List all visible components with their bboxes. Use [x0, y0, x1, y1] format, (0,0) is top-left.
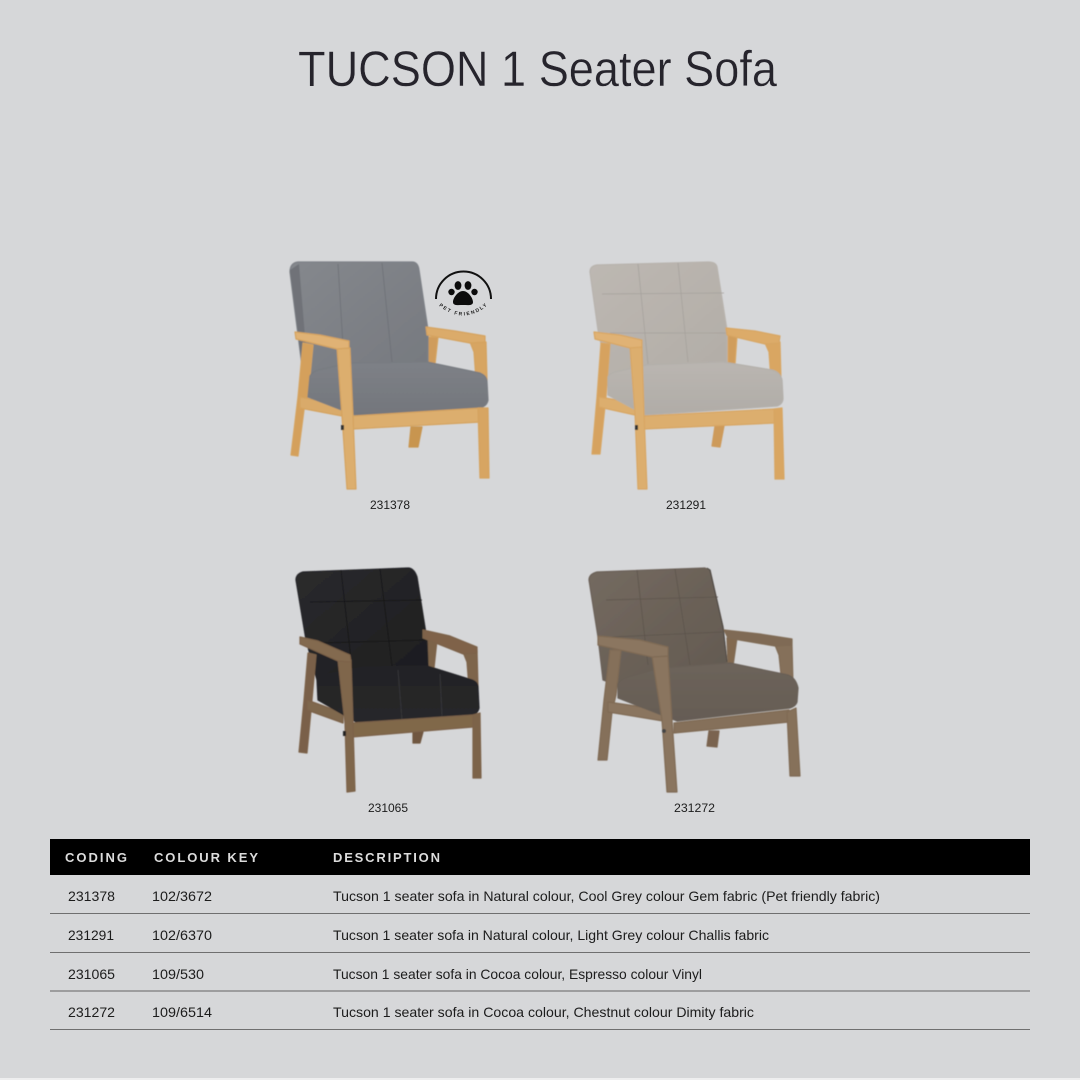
code label 231065: 231065 [368, 801, 408, 815]
row 231065: 231065 [68, 966, 115, 982]
row 231378: 231378 [68, 888, 115, 904]
row 231272: Tucson 1 seater sofa in Cocoa colour, Chestnut colour Dimity fabric [333, 1004, 754, 1020]
row 231065: 109/530 [152, 966, 204, 982]
product: chair 231065 espresso vinyl [296, 568, 481, 792]
product: chair 231291 light grey [590, 262, 784, 489]
product: chair 231272 chestnut [589, 568, 800, 792]
row 231065 [50, 966, 1030, 991]
row 231272: 231272 [68, 1004, 115, 1020]
row 231378: Tucson 1 seater sofa in Natural colour, Cool Grey colour Gem fabric (Pet friendly fabric) [333, 888, 880, 904]
row 231272 [50, 1004, 1030, 1030]
row 231272: 109/6514 [152, 1004, 212, 1020]
row 231291 [50, 927, 1030, 952]
code label 231272: 231272 [674, 801, 715, 815]
icon: pet friendly badge [435, 270, 492, 316]
product: chair 231378 cool grey [290, 262, 489, 489]
row 231291: 231291 [68, 927, 114, 943]
row 231065: Tucson 1 seater sofa in Cocoa colour, Espresso colour Vinyl [333, 966, 702, 982]
row 231378 [50, 888, 1030, 914]
row 231291: 102/6370 [152, 927, 212, 943]
table [50, 839, 1030, 1030]
table header: CODING [65, 850, 127, 865]
table header [50, 839, 1030, 875]
icon: pet friendly badge: PET FRIENDLY [439, 303, 486, 316]
code label 231378: 231378 [370, 498, 410, 512]
row 231291: Tucson 1 seater sofa in Natural colour, Light Grey colour Challis fabric [333, 927, 769, 943]
title: TUCSON 1 Seater Sofa [298, 41, 777, 97]
table header: DESCRIPTION [333, 850, 440, 865]
code label 231291: 231291 [666, 498, 706, 512]
row 231378: 102/3672 [152, 888, 212, 904]
table header: COLOUR KEY [154, 850, 258, 865]
